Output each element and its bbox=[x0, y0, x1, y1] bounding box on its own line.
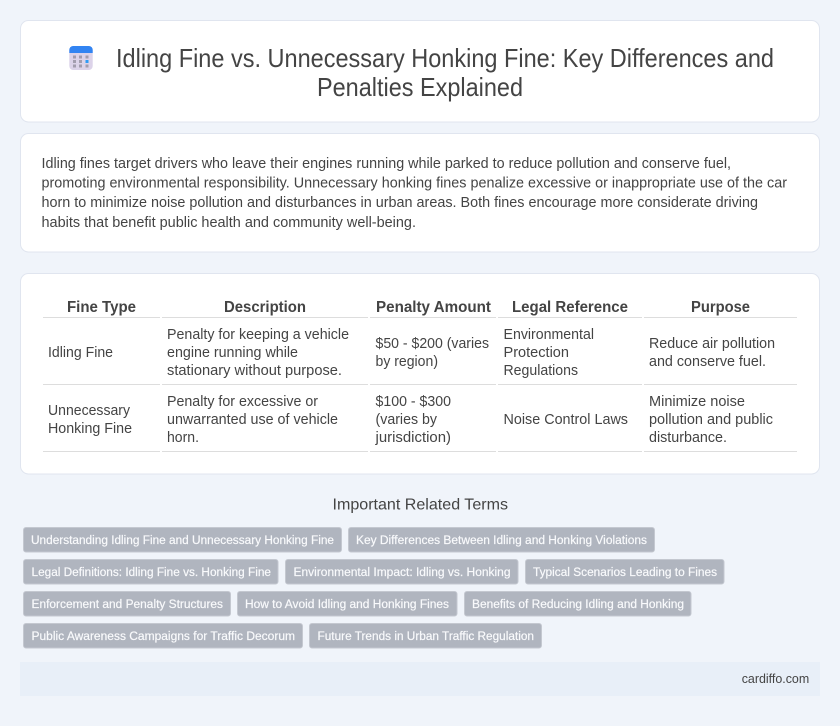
table row: unnecessary honking fine: Penalty for excessive or bbox=[167, 394, 318, 410]
table row: unnecessary honking fine: (varies by bbox=[376, 412, 438, 428]
title: Penalties Explained bbox=[317, 72, 523, 102]
tag: Understanding Idling Fine and Unnecessary Honking Fine bbox=[31, 533, 334, 547]
table row: idling fine: stationary without purpose. bbox=[167, 363, 342, 379]
table row: unnecessary honking fine: unwarranted use of vehicle bbox=[167, 412, 338, 428]
text block: introduction paragraph: habits that benefit public health and community well-being. bbox=[42, 215, 416, 231]
table row: unnecessary honking fine: Minimize noise bbox=[649, 394, 745, 410]
tag bbox=[24, 592, 230, 616]
tag bbox=[464, 592, 691, 616]
tag: Legal Definitions: Idling Fine vs. Honking Fine bbox=[32, 565, 271, 579]
table header row: Fine Type bbox=[67, 299, 136, 316]
text block: introduction paragraph bbox=[42, 156, 787, 231]
heading: important related terms: Important Related Terms bbox=[332, 496, 508, 514]
tag bbox=[24, 624, 302, 648]
table row: unnecessary honking fine: pollution and public bbox=[649, 412, 773, 428]
text block: introduction paragraph: Idling fines target drivers who leave their engines running while parked to reduce pollution and conserve fuel, bbox=[42, 156, 731, 172]
table row: unnecessary honking fine: horn. bbox=[167, 430, 199, 446]
tag: Environmental Impact: Idling vs. Honking bbox=[294, 565, 510, 579]
table row: unnecessary honking fine: Noise Control Laws bbox=[504, 412, 628, 428]
icon: calendar bbox=[69, 46, 93, 70]
table row: idling fine: Protection bbox=[504, 345, 569, 361]
table header row: Description bbox=[224, 299, 306, 316]
table row: idling fine: $50 - $200 (varies bbox=[376, 336, 489, 352]
table row: unnecessary honking fine: jurisdiction) bbox=[374, 430, 451, 446]
table row: unnecessary honking fine: Unnecessary bbox=[48, 403, 131, 419]
tag bbox=[238, 592, 457, 616]
tag bbox=[310, 624, 542, 648]
text block: introduction paragraph: promoting environmental responsibility. Unnecessary honking fines penalize excessive or inappropriate use of the car bbox=[42, 176, 787, 192]
tag: Public Awareness Campaigns for Traffic Decorum bbox=[32, 629, 295, 643]
table header row: Penalty Amount bbox=[376, 299, 492, 316]
tag bbox=[24, 560, 278, 584]
table row: idling fine bbox=[43, 327, 797, 385]
table header row: Legal Reference bbox=[512, 299, 628, 316]
tag bbox=[526, 560, 724, 584]
table row: idling fine: Regulations bbox=[504, 363, 578, 379]
table row: idling fine: Reduce air pollution bbox=[649, 336, 775, 352]
table row: unnecessary honking fine: $100 - $300 bbox=[376, 394, 451, 410]
table row: unnecessary honking fine bbox=[43, 394, 797, 452]
table row: idling fine: Penalty for keeping a vehicle bbox=[167, 327, 349, 343]
tag: Future Trends in Urban Traffic Regulation bbox=[318, 629, 534, 643]
table header row bbox=[43, 299, 797, 318]
tag: How to Avoid Idling and Honking Fines bbox=[245, 597, 449, 611]
tag bbox=[348, 528, 654, 552]
table row: idling fine: by region) bbox=[376, 354, 438, 370]
table row: idling fine: Idling Fine bbox=[48, 345, 113, 361]
table header row: Purpose bbox=[691, 299, 750, 316]
table row: unnecessary honking fine: Honking Fine bbox=[48, 421, 132, 437]
panel: title header bbox=[20, 20, 820, 122]
table row: unnecessary honking fine: disturbance. bbox=[649, 430, 727, 446]
footer bbox=[20, 662, 820, 696]
tag: Enforcement and Penalty Structures bbox=[32, 597, 223, 611]
tag bbox=[286, 560, 518, 584]
panel: comparison table bbox=[20, 274, 820, 474]
tag: Typical Scenarios Leading to Fines bbox=[533, 565, 717, 579]
related term tags bbox=[24, 528, 724, 648]
table row: idling fine: Environmental bbox=[504, 327, 594, 343]
panel: introduction bbox=[20, 134, 820, 252]
table row: idling fine: and conserve fuel. bbox=[649, 354, 766, 370]
tag bbox=[24, 528, 342, 552]
title: Idling Fine vs. Unnecessary Honking Fine: Key Differences and bbox=[116, 43, 774, 73]
tag: Key Differences Between Idling and Honking Violations bbox=[356, 533, 647, 547]
tag: Benefits of Reducing Idling and Honking bbox=[472, 597, 684, 611]
text block: introduction paragraph: horn to minimize noise pollution and disturbances in urban areas. Both fines encourage more considerate driving bbox=[42, 195, 758, 211]
footer: cardiffo.com bbox=[742, 672, 809, 686]
table row: idling fine: engine running while bbox=[167, 345, 298, 361]
title bbox=[116, 43, 774, 102]
